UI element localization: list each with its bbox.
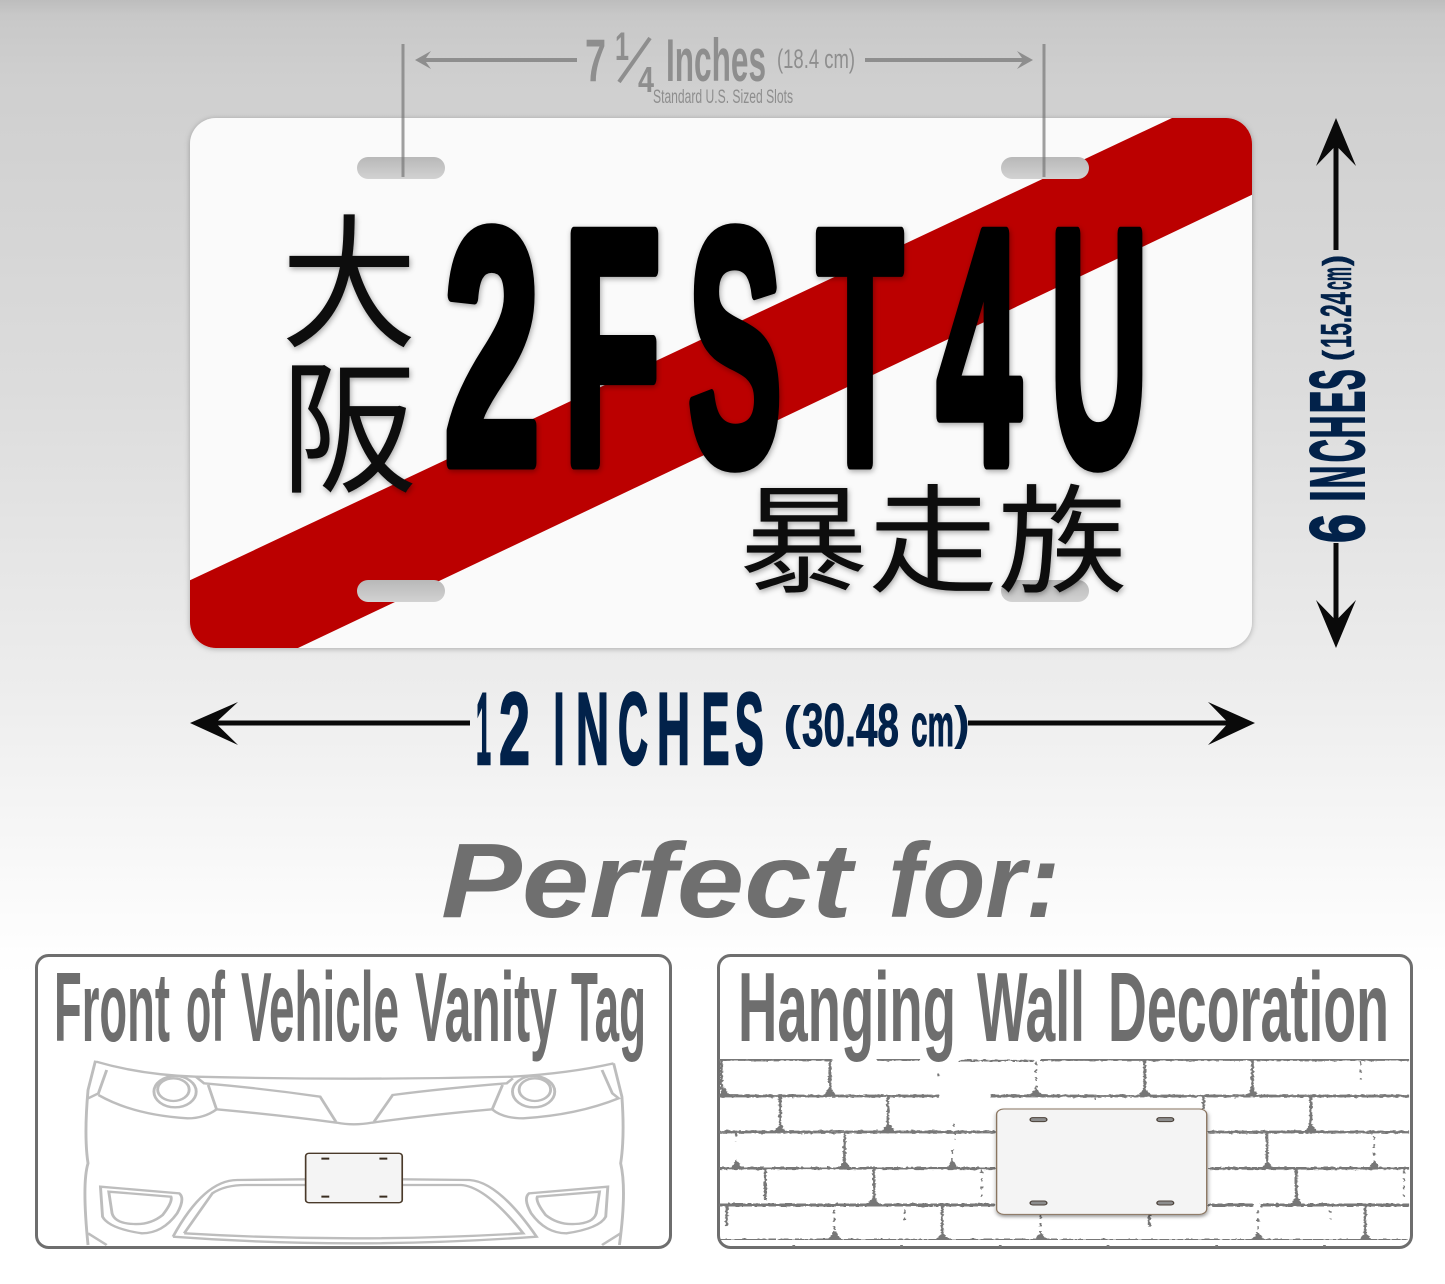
panel: front of vehicle (36, 952, 670, 1248)
6 inches label: 15.24 (1312, 292, 1361, 348)
panel title: Front (54, 952, 170, 1062)
panel title: of (186, 952, 225, 1062)
width dimension: 12 inches (190, 671, 1255, 786)
license plate (180, 118, 1260, 648)
plate number 2FST4U: T (817, 161, 903, 534)
7 1/4 inches label: Standard U.S. Sized Slots (653, 87, 793, 108)
right arrow (865, 51, 1033, 69)
panel title (738, 952, 1389, 1062)
panel title: Vanity (415, 952, 557, 1062)
6 inches label: C (1295, 439, 1381, 462)
right arrow (968, 702, 1255, 745)
heading: Perfect for: for: (888, 822, 1060, 940)
12 inches label: C (618, 671, 648, 786)
heading: Perfect for: Perfect (441, 822, 856, 940)
12 inches label: 2 (499, 671, 530, 786)
7 1/4 inches label: 4 (638, 59, 654, 100)
panel title (54, 952, 646, 1062)
12 inches label: H (657, 671, 690, 786)
small plate on bumper (306, 1153, 402, 1203)
centimetres label: ) (955, 697, 969, 749)
6 inches label: E (1295, 391, 1381, 413)
down arrow (1316, 543, 1356, 648)
plate number 2FST4U: 2 (444, 161, 540, 534)
panel: front of vehicle: Tag (571, 952, 646, 1062)
prefecture kanji: Osaka: 阪 (281, 350, 417, 512)
panel: hanging wall decoration (718, 952, 1412, 1248)
6 inches label: N (1295, 466, 1381, 488)
7 1/4 inches label: Inches (666, 27, 766, 94)
12 inches label (476, 671, 969, 786)
12 inches label: E (702, 671, 730, 786)
12 inches label: N (576, 671, 609, 786)
6 inches label: S (1295, 369, 1381, 390)
panel title: Hanging (738, 952, 956, 1062)
prefecture kanji: Osaka: 大 (281, 205, 417, 367)
7 1/4 inches label: 1 (615, 25, 629, 69)
license plate: U (1050, 161, 1148, 534)
slot spacing dimension: 7 1/4 inches (402, 25, 1046, 177)
heading: Perfect for (441, 822, 1060, 940)
centimetres label: 30.48 (802, 692, 899, 759)
brick wall (719, 1059, 1412, 1248)
left arrow (415, 51, 577, 69)
left arrow (190, 702, 470, 745)
7 1/4 inches label: (18.4 cm) (777, 44, 855, 74)
6 inches label: cm (1312, 267, 1361, 290)
plate number 2FST4U: 4 (937, 161, 1022, 534)
mounting slots (357, 157, 1089, 602)
prefecture kanji: Osaka (281, 205, 417, 512)
6 inches label: ) (1317, 255, 1355, 266)
12 inches label: 1 (476, 671, 491, 786)
centimetres label: ( (784, 697, 801, 749)
panel title: Wall (977, 952, 1085, 1062)
bosozoku kanji: 暴走族 (739, 477, 1127, 609)
up arrow (1316, 118, 1356, 250)
plate number 2FST4U: S (688, 161, 782, 534)
12 inches label: I (554, 671, 564, 786)
7 1/4 inches label (585, 25, 855, 108)
12 inches label: S (735, 671, 764, 786)
6 inches label: ( (1317, 349, 1355, 361)
6 inches label: H (1295, 416, 1381, 438)
7 1/4 inches label: 7 (585, 27, 606, 94)
6 inches label: I (1295, 490, 1381, 502)
panel title: Vehicle (241, 952, 399, 1062)
6 inches label: 6 (1295, 514, 1381, 543)
plate number 2FST4U (444, 161, 1148, 534)
car front line drawing (85, 1061, 623, 1245)
centimetres label: cm (911, 692, 954, 759)
red diagonal band (180, 118, 1260, 648)
height dimension: 6 inches (1295, 118, 1381, 648)
plate number 2FST4U: F (563, 161, 661, 534)
6 inches label (1295, 255, 1381, 543)
plate on wall (997, 1109, 1207, 1214)
